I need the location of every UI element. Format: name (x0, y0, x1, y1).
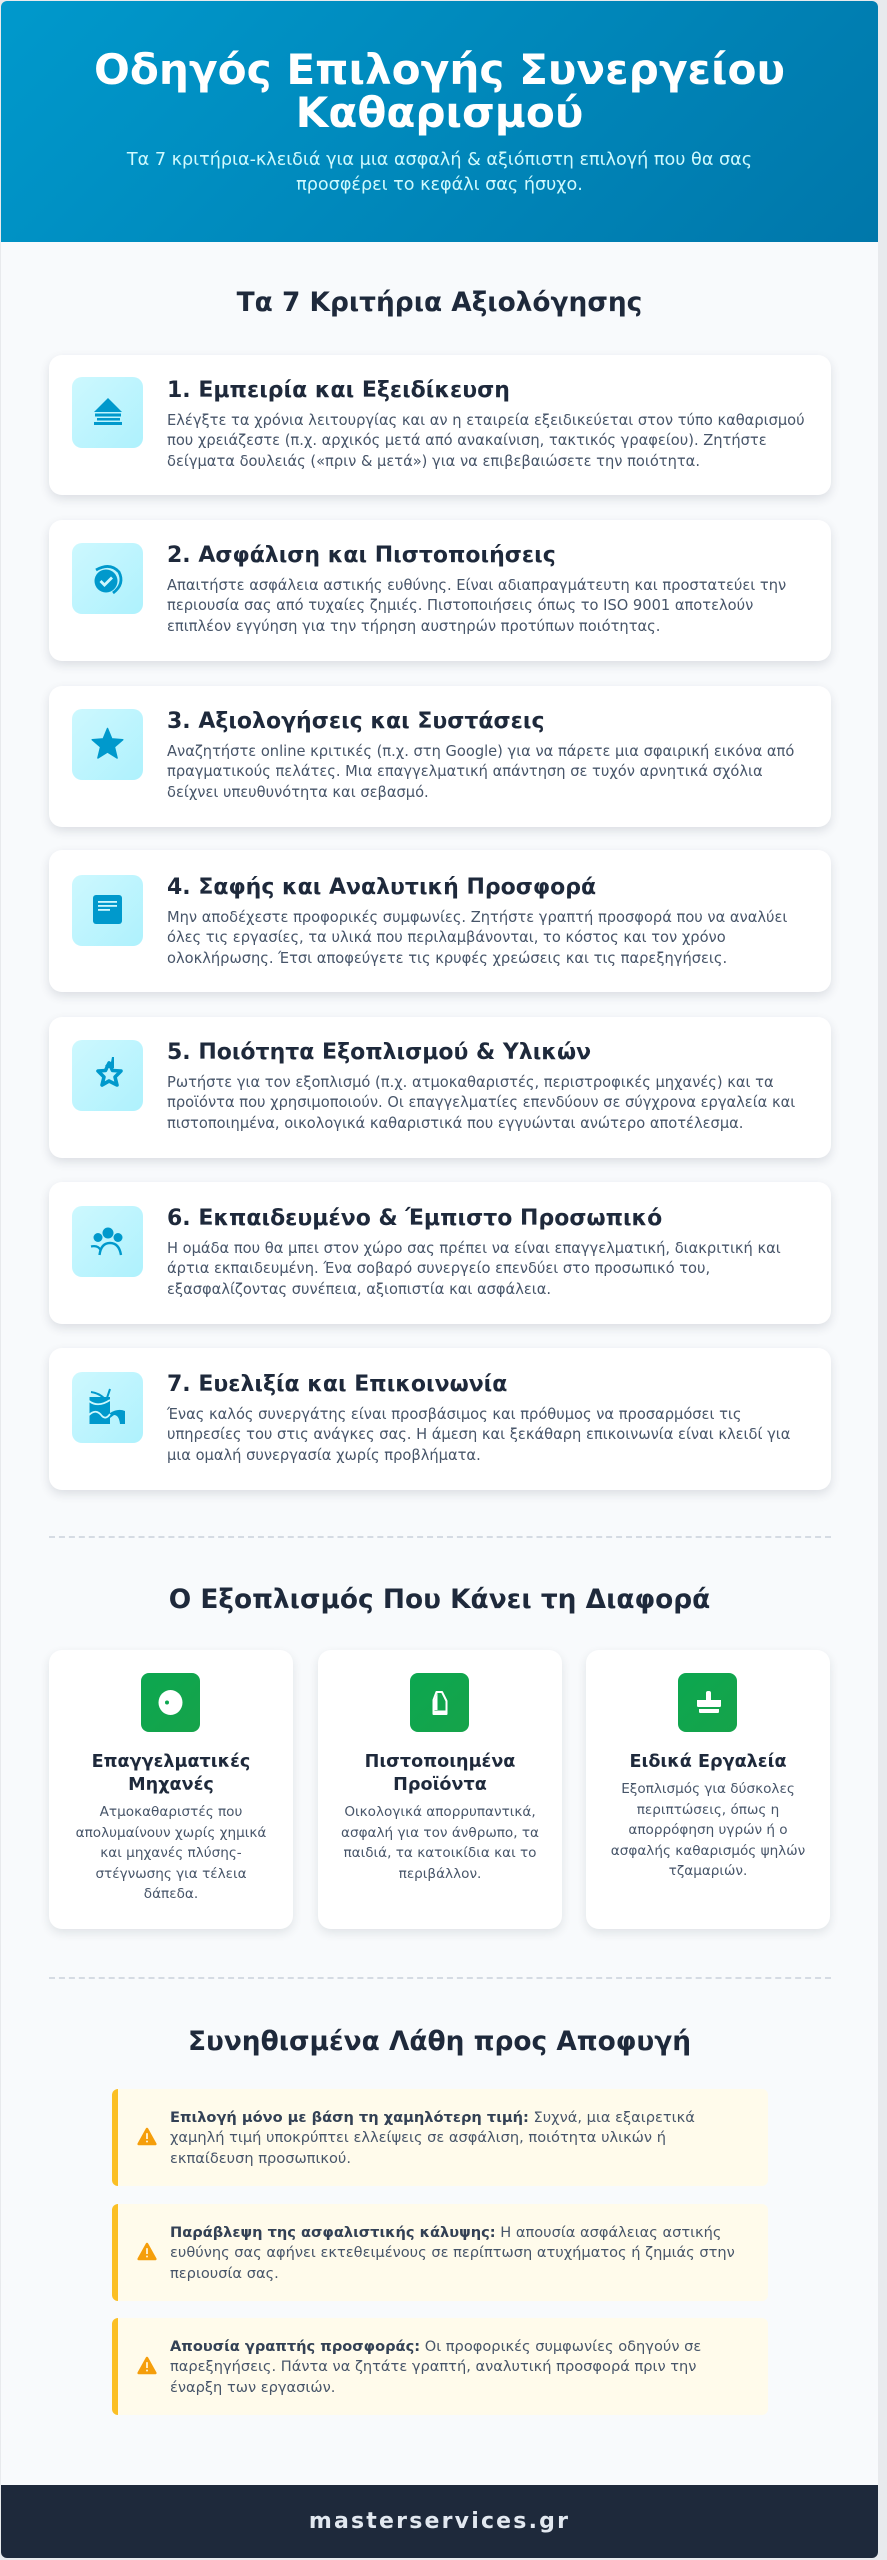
heading: common mistakes: Συνηθισμένα Λάθη προς Αποφυγή (188, 2026, 691, 2057)
tool text: παιδιά, τα κατοικίδια και το (343, 1845, 536, 1861)
criterion 6 text: εξασφαλίζοντας συνέπεια, αξιοπιστία και ασφάλεια. (167, 1281, 551, 1298)
icon: star (72, 709, 143, 780)
panel: criterion 4 (49, 850, 831, 992)
panel: professional machines (49, 1650, 293, 1929)
criterion 2 title: 2. Ασφάλιση και Πιστοποιήσεις (167, 543, 556, 568)
criterion 2 text: επιπλέον εγγύηση για την τήρηση αυστηρών προτύπων ποιότητας. (167, 618, 660, 635)
criterion 6 text: Η ομάδα που θα μπει στον χώρο σας πρέπει να είναι επαγγελματική, διακριτική και (167, 1240, 781, 1256)
header banner (1, 1, 878, 242)
callout text: περιουσία σας. (170, 2265, 279, 2282)
tool text: απολυμαίνουν χωρίς χημικά (76, 1824, 266, 1840)
criterion 1 text: που χρειάζεστε (π.χ. αρχικός μετά από ανακαίνιση, τακτικός γραφείου). Ζητήστε (167, 432, 767, 449)
tool title: Πιστοποιημένα (365, 1752, 515, 1772)
icon: document (72, 875, 143, 946)
tool title: Επαγγελματικές (92, 1752, 250, 1772)
criterion 5 text: Ρωτήστε για τον εξοπλισμό (π.χ. ατμοκαθαριστές, περιστροφικές μηχανές) και τα (167, 1074, 774, 1090)
panel: certified products (318, 1650, 562, 1929)
icon: flexibility (72, 1372, 143, 1443)
criterion 4 text (167, 908, 787, 967)
tool text: Εξοπλισμός για δύσκολες (621, 1781, 795, 1797)
criterion 4 text: Μην αποδέχεστε προφορικές συμφωνίες. Ζητήστε γραπτή προσφορά που να αναλύει (167, 908, 787, 926)
panel: criterion 7 (49, 1348, 831, 1490)
criterion 5 text: πιστοποιημένα, οικολογικά καθαριστικά που εγγυώνται ανώτερο αποτέλεσμα. (167, 1115, 743, 1132)
callout: written offer (112, 2318, 768, 2415)
callout text: εκπαίδευση προσωπικού. (170, 2150, 351, 2167)
tool text (341, 1804, 539, 1882)
subtitle: προσφέρει το κεφάλι σας ήσυχο. (296, 175, 583, 195)
subtitle: Τα 7 κριτήρια-κλειδιά για μια ασφαλή & αξιόπιστη επιλογή που θα σας (127, 150, 752, 170)
criterion 6 text (167, 1240, 781, 1298)
main title: Οδηγός Επιλογής Συνεργείου (94, 44, 785, 94)
criterion 7 text (166, 1406, 790, 1464)
criterion 2 text: Απαιτήστε ασφάλεια αστικής ευθύνης. Είναι αδιαπραγμάτευτη και προστατεύει την (167, 576, 786, 594)
tool text: ασφαλή για τον άνθρωπο, τα (341, 1824, 539, 1840)
criterion 3 text (167, 742, 794, 801)
criterion 3 text: πραγματικούς πελάτες. Μια επαγγελματική απάντηση σε τυχόν αρνητικά σχόλια (167, 763, 763, 780)
callout text: έναρξη των εργασιών. (170, 2379, 335, 2396)
tool text (611, 1781, 805, 1879)
callout: lowest price (112, 2089, 768, 2186)
callout text (170, 2108, 695, 2167)
criterion 7 title: 7. Ευελιξία και Επικοινωνία (167, 1372, 507, 1397)
panel: criterion 6 (49, 1182, 831, 1324)
tool title (92, 1752, 250, 1795)
criterion 6 text: άρτια εκπαιδευμένη. Ένα σοβαρό συνεργείο επενδύει στο προσωπικό του, (167, 1260, 710, 1277)
heading: 7 criteria: Τα 7 Κριτήρια Αξιολόγησης (237, 287, 642, 318)
callout text: Απουσία γραπτής προσφοράς: Οι προφορικές συμφωνίες οδηγούν σε (170, 2338, 701, 2354)
criterion 3 title: 3. Αξιολογήσεις και Συστάσεις (167, 709, 545, 734)
callout text: χαμηλή τιμή υποκρύπτει ελλείψεις σε ασφάλιση, ποιότητα υλικών ή (170, 2129, 666, 2146)
callout text: Παράβλεψη της ασφαλιστικής κάλυψης: Η απουσία ασφάλειας αστικής (170, 2224, 721, 2240)
main title (94, 44, 785, 136)
criterion 4 text: ολοκλήρωσης. Έτσι αποφεύγετε τις κρυφές χρεώσεις και τις παρεξηγήσεις. (167, 950, 727, 967)
tool text: τζαμαριών. (669, 1863, 747, 1879)
criterion 5 text (167, 1074, 795, 1132)
criterion 2 text (167, 576, 786, 635)
icon: warning (137, 2356, 157, 2374)
icon: house stack (72, 377, 143, 448)
tool text: περιπτώσεις, όπως η (637, 1802, 779, 1818)
subtitle (126, 150, 752, 195)
callout text: Επιλογή μόνο με βάση τη χαμηλότερη τιμή: Συχνά, μια εξαιρετικά (170, 2108, 695, 2126)
criterion 5 text: προϊόντα που χρησιμοποιούν. Οι επαγγελματίες επενδύουν σε σύγχρονα εργαλεία και (167, 1094, 795, 1111)
criterion 4 title: 4. Σαφής και Αναλυτική Προσφορά (167, 875, 596, 900)
tool text: Ατμοκαθαριστές που (100, 1804, 242, 1820)
tool text: δάπεδα. (144, 1886, 198, 1902)
tool title (365, 1752, 515, 1795)
criterion 7 text: Ένας καλός συνεργάτης είναι προσβάσιμος και πρόθυμος να προσαρμόσει τις (167, 1406, 741, 1422)
icon: team (72, 1206, 143, 1277)
panel: criterion 2 (49, 520, 831, 661)
icon: warning (137, 2128, 157, 2146)
criterion 1 title: 1. Εμπειρία και Εξειδίκευση (167, 378, 510, 403)
tool title: Ειδικά Εργαλεία (629, 1752, 787, 1772)
criterion 3 text: Αναζητήστε online κριτικές (π.χ. στη Google) για να πάρετε μια σφαιρική εικόνα από (167, 742, 794, 760)
callout: insurance (112, 2204, 768, 2301)
criterion 1 text (167, 412, 805, 470)
panel: criterion 3 (49, 686, 831, 827)
icon: disc machine (141, 1673, 200, 1732)
icon: outlined star (72, 1040, 143, 1111)
criterion 4 text: όλες τις εργασίες, τα υλικά που περιλαμβάνονται, το κόστος και τον χρόνο (167, 929, 726, 946)
criterion 7 text: υπηρεσίες του στις ανάγκες σας. Η άμεση και ξεκάθαρη επικοινωνία είναι κλειδί για (167, 1426, 790, 1443)
criterion 1 text: Ελέγξτε τα χρόνια λειτουργίας και αν η εταιρεία εξειδικεύεται στον τύπο καθαρισμού (167, 412, 805, 428)
tool text: και μηχανές πλύσης- (100, 1845, 242, 1861)
heading: equipment: Ο Εξοπλισμός Που Κάνει τη Διαφορά (169, 1584, 710, 1615)
tool text: απορρόφηση υγρών ή ο (628, 1822, 788, 1838)
tool text: Οικολογικά απορρυπαντικά, (344, 1804, 536, 1820)
icon: brush (678, 1673, 737, 1732)
icon: bottle (410, 1673, 469, 1732)
icon: shield check (72, 543, 143, 614)
criterion 7 text: μια ομαλή συνεργασία χωρίς προβλήματα. (167, 1447, 481, 1464)
criterion 2 text: περιουσία σας από τυχαίες ζημιές. Πιστοποιήσεις όπως το ISO 9001 αποτελούν (167, 597, 753, 614)
criterion 6 title: 6. Εκπαιδευμένο & Έμπιστο Προσωπικό (167, 1206, 662, 1231)
footer (1, 2485, 878, 2558)
criterion 3 text: δείχνει υπευθυνότητα και σεβασμό. (167, 784, 429, 801)
callout text (170, 2338, 701, 2396)
panel: criterion 1 (49, 355, 831, 495)
icon: warning (137, 2242, 157, 2260)
panel: criterion 5 (49, 1017, 831, 1158)
tool text: περιβάλλον. (399, 1866, 481, 1882)
callout text (170, 2224, 735, 2282)
criterion 5 title: 5. Ποιότητα Εξοπλισμού & Υλικών (167, 1040, 591, 1065)
tool text (76, 1804, 266, 1902)
callout text: ευθύνης σας αφήνει εκτεθειμένους σε περίπτωση ατυχήματος ή ζημιάς στην (170, 2244, 735, 2261)
tool title: Προϊόντα (393, 1775, 487, 1795)
panel: special tools (586, 1650, 830, 1929)
tool text: ασφαλής καθαρισμός ψηλών (611, 1842, 805, 1858)
main title: Καθαρισμού (296, 88, 583, 136)
callout text: παρεξηγήσεις. Πάντα να ζητάτε γραπτή, αναλυτική προσφορά πριν την (170, 2358, 696, 2375)
tool text: στέγνωσης για τέλεια (95, 1866, 247, 1882)
tool title: Μηχανές (128, 1775, 214, 1795)
footer: masterservices.gr (309, 2509, 570, 2534)
criterion 1 text: δείγματα δουλειάς («πριν & μετά») για να επιβεβαιώσετε την ποιότητα. (167, 453, 700, 470)
